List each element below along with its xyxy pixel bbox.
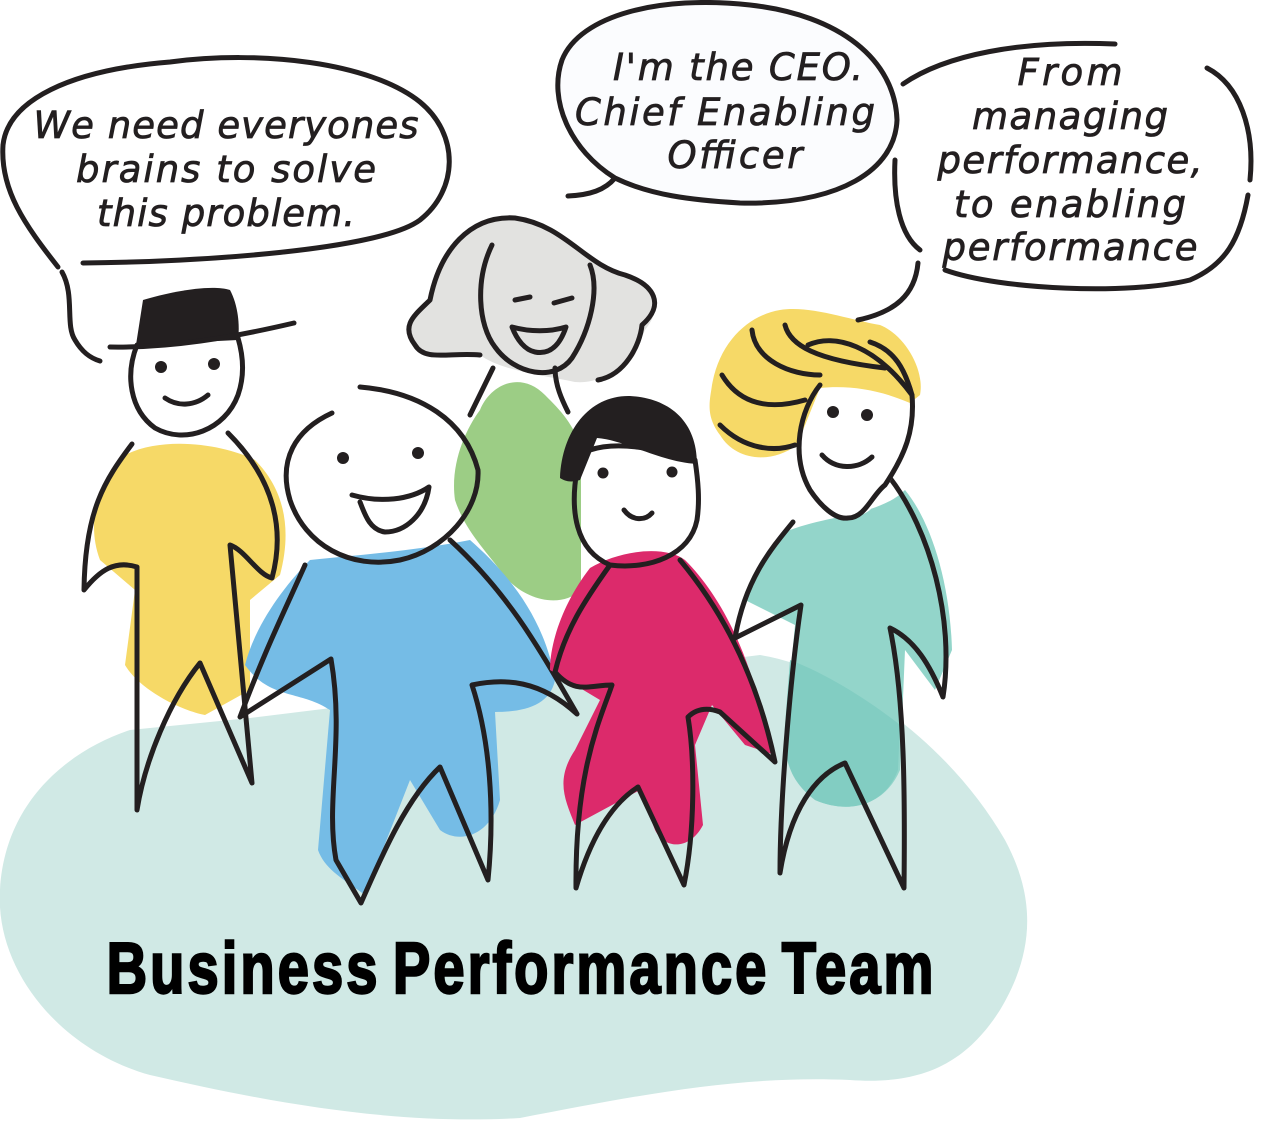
bubble tail — [858, 263, 918, 320]
face — [337, 447, 429, 532]
hat brim — [110, 323, 294, 347]
figure: blue person — [240, 387, 577, 903]
blue body — [245, 540, 555, 895]
title: Business Performance Team — [107, 928, 933, 1009]
face — [822, 406, 873, 467]
bubble outline — [558, 2, 897, 203]
ground blob — [0, 655, 1027, 1119]
speech bubble: centre: Chief Enabling — [575, 91, 875, 134]
figure: black-haired person — [550, 396, 775, 888]
speech bubble: left — [3, 58, 449, 361]
hair strands — [720, 325, 912, 448]
yellow body outline — [84, 433, 277, 810]
teal body overlap — [785, 660, 900, 807]
head fill — [798, 385, 912, 517]
teal body — [745, 490, 952, 807]
speech bubble: right — [858, 43, 1251, 320]
speech bubble: right: to enabling — [954, 183, 1186, 226]
hair — [710, 309, 921, 457]
speech bubble: right: performance, — [936, 139, 1202, 182]
speech bubble: right: performance — [942, 226, 1198, 269]
hair outline — [409, 218, 655, 380]
head — [574, 446, 698, 566]
speech bubble: left: brains to solve — [76, 148, 376, 191]
hair top — [560, 396, 697, 481]
head — [286, 387, 478, 562]
speech bubble: centre — [558, 2, 897, 203]
bubble text: I'm the CEO. — [613, 46, 863, 89]
head outline — [799, 342, 913, 518]
pink body — [550, 551, 775, 844]
neck lines — [470, 368, 568, 415]
bubble fill — [558, 2, 897, 203]
bubble text: We need everyones — [34, 104, 418, 147]
face — [598, 466, 678, 519]
speech bubble: left: this problem. — [97, 192, 355, 235]
green body — [454, 382, 581, 600]
face — [155, 358, 220, 404]
figure: blonde person — [710, 309, 952, 888]
head — [481, 245, 594, 373]
head — [131, 338, 243, 435]
bubble text: From — [1018, 51, 1122, 94]
face — [512, 297, 572, 353]
blue body outline — [240, 540, 577, 903]
bubble outline — [895, 43, 1251, 289]
hair — [409, 218, 655, 382]
figure: yellow person — [84, 288, 294, 810]
figure: grey-haired person — [409, 218, 655, 600]
bubble tail — [62, 272, 100, 361]
yellow body — [94, 444, 286, 715]
speech bubble: right: managing — [972, 95, 1168, 138]
speech bubble: centre: Officer — [668, 134, 805, 177]
pink body outline — [555, 560, 775, 888]
hat — [136, 288, 239, 345]
teal body outline — [735, 478, 946, 888]
bubble outline — [3, 58, 449, 267]
